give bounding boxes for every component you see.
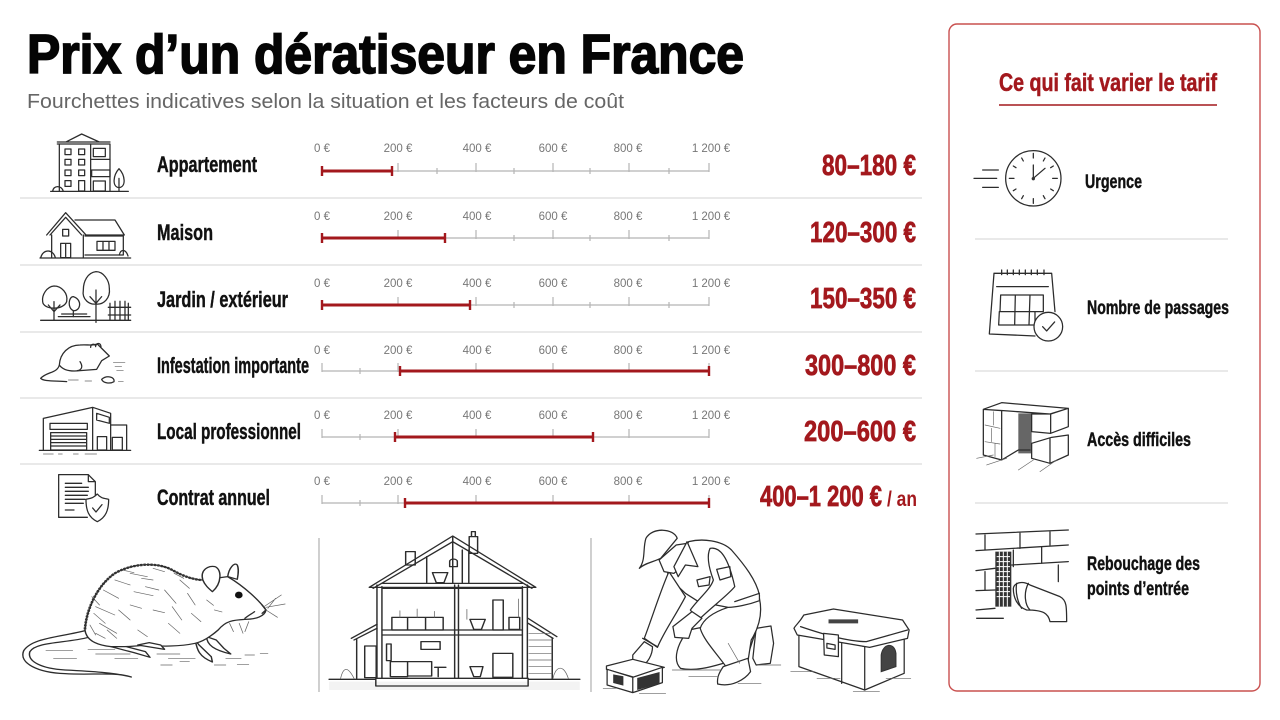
icon: difficult access: [977, 403, 1068, 472]
range chart: Infestation importante: 600 €: [539, 345, 568, 357]
range chart: Infestation importante: 400 €: [463, 345, 492, 357]
range chart: Local professionnel: 800 €: [614, 410, 643, 422]
price: Infestation importante: 300–800 €: [805, 350, 916, 382]
label: Maison: Maison: [157, 220, 213, 245]
range chart: Maison: [314, 211, 731, 243]
range chart: Appartement: 0 €: [314, 143, 331, 155]
range chart: Contrat annuel: 0 €: [314, 476, 331, 488]
label: Jardin / extérieur: Jardin / extérieur: [157, 287, 288, 312]
range chart: Jardin / extérieur: 1 200 €: [692, 278, 731, 290]
label: Rebouchage des points d’entrée: Rebouchage des: [1087, 554, 1200, 575]
range chart: Maison: 1 200 €: [692, 211, 731, 223]
figure: large bait station: [791, 609, 911, 692]
illustration: house cutaway: [329, 532, 580, 690]
range chart: Infestation importante: 1 200 €: [692, 345, 731, 357]
icon: garden: [41, 272, 131, 322]
price: Local professionnel: 200–600 €: [804, 416, 916, 448]
range chart: Local professionnel: [314, 410, 731, 442]
illustration: rat: [23, 564, 285, 677]
range chart: Infestation importante: 800 €: [614, 345, 643, 357]
range chart: Jardin / extérieur: [314, 278, 731, 310]
row: Jardin / extérieur: [41, 272, 916, 322]
range chart: Maison: 0 €: [314, 211, 331, 223]
label: Contrat annuel: Contrat annuel: [157, 485, 270, 510]
icon: warehouse: [39, 407, 131, 454]
range chart: Contrat annuel: 1 200 €: [692, 476, 731, 488]
range chart: Infestation importante: 0 €: [314, 345, 331, 357]
range chart: Appartement: [314, 143, 731, 176]
row: Infestation importante: [41, 343, 916, 383]
price: Jardin / extérieur: 150–350 €: [810, 283, 916, 315]
range chart: Jardin / extérieur: 200 €: [384, 278, 413, 290]
range chart: Appartement: 400 €: [463, 143, 492, 155]
figure: small bait box: [603, 659, 666, 693]
range chart: Jardin / extérieur: 0 €: [314, 278, 331, 290]
icon: house: [40, 213, 131, 258]
range chart: Jardin / extérieur: 400 €: [463, 278, 492, 290]
range chart: Maison: 200 €: [384, 211, 413, 223]
label: Urgence: Urgence: [1085, 172, 1142, 193]
range chart: Local professionnel: 400 €: [463, 410, 492, 422]
range chart: Appartement: 1 200 €: [692, 143, 731, 155]
range chart: Infestation importante: 200 €: [384, 345, 413, 357]
label: second line: points d’entrée: [1087, 579, 1189, 600]
price: Contrat annuel: 400–1 200 €: [760, 481, 882, 513]
label: Infestation importante: Infestation importante: [157, 353, 309, 378]
row: Appartement: [51, 134, 916, 191]
range chart: Jardin / extérieur: 800 €: [614, 278, 643, 290]
range chart: Maison: 800 €: [614, 211, 643, 223]
row: Local professionnel: [39, 407, 916, 454]
icon: calendar: [989, 270, 1063, 341]
range chart: Local professionnel: 1 200 €: [692, 410, 731, 422]
range chart: Contrat annuel: 400 €: [463, 476, 492, 488]
range chart: Local professionnel: 0 €: [314, 410, 331, 422]
icon: sealing entry points: [976, 530, 1068, 622]
range chart: Appartement: 200 €: [384, 143, 413, 155]
range chart: Contrat annuel: 600 €: [539, 476, 568, 488]
price: Appartement: 80–180 €: [822, 150, 916, 182]
icon: clock: [974, 151, 1061, 206]
icon: contract with shield: [59, 475, 109, 522]
range chart: Contrat annuel: 800 €: [614, 476, 643, 488]
range chart: Contrat annuel: 200 €: [384, 476, 413, 488]
row: Maison: [40, 211, 916, 258]
figure: kneeling technician: [633, 530, 781, 685]
range chart: Appartement: 800 €: [614, 143, 643, 155]
range chart: Appartement: 600 €: [539, 143, 568, 155]
label: Accès difficiles: Accès difficiles: [1087, 430, 1191, 451]
icon: apartment building: [51, 134, 128, 191]
range chart: Local professionnel: 200 €: [384, 410, 413, 422]
label: Local professionnel: Local professionnel: [157, 419, 301, 444]
range chart: Maison: 600 €: [539, 211, 568, 223]
label: Appartement: Appartement: [157, 152, 257, 177]
range chart: Local professionnel: 600 €: [539, 410, 568, 422]
row: Contrat annuel: [59, 475, 917, 522]
panel: cost factors: [949, 24, 1260, 691]
subtitle: Fourchettes indicatives selon la situation et les facteurs de coût: [27, 91, 624, 113]
range chart: Jardin / extérieur: 600 €: [539, 278, 568, 290]
panel heading: Ce qui fait varier le tarif: [999, 69, 1218, 97]
label: Nombre de passages: Nombre de passages: [1087, 298, 1229, 319]
range chart: Infestation importante: [314, 345, 731, 376]
range chart: Contrat annuel: [314, 476, 731, 508]
range chart: Maison: 400 €: [463, 211, 492, 223]
illustration: technician and bait stations: [603, 530, 911, 693]
icon: small rat: [41, 343, 125, 383]
price: Maison: 120–300 €: [810, 217, 916, 249]
title: Prix d’un dératiseur en France: [27, 23, 744, 85]
unit: per year: / an: [887, 488, 917, 511]
